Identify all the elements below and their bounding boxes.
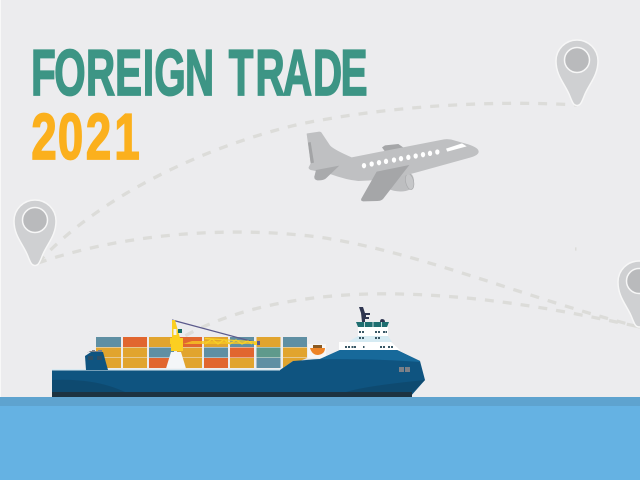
- container ship: [52, 307, 425, 397]
- crane: [166, 320, 260, 368]
- icon: location pin top right: [556, 40, 598, 106]
- lifeboat: [308, 344, 326, 358]
- hull: [52, 350, 425, 397]
- stern tower: [85, 350, 108, 370]
- icon: airplane: [306, 132, 479, 201]
- icon: location pin left: [14, 200, 56, 266]
- heading: foreign trade: FOREIGN TRADE: [31, 37, 368, 109]
- title: [31, 37, 368, 173]
- containers: [96, 337, 307, 368]
- dashed route lines: [38, 103, 640, 345]
- icon: location pin right edge: [618, 261, 640, 327]
- heading: year: 2021: [31, 100, 140, 173]
- superstructure: [339, 307, 400, 350]
- sea: [0, 397, 640, 480]
